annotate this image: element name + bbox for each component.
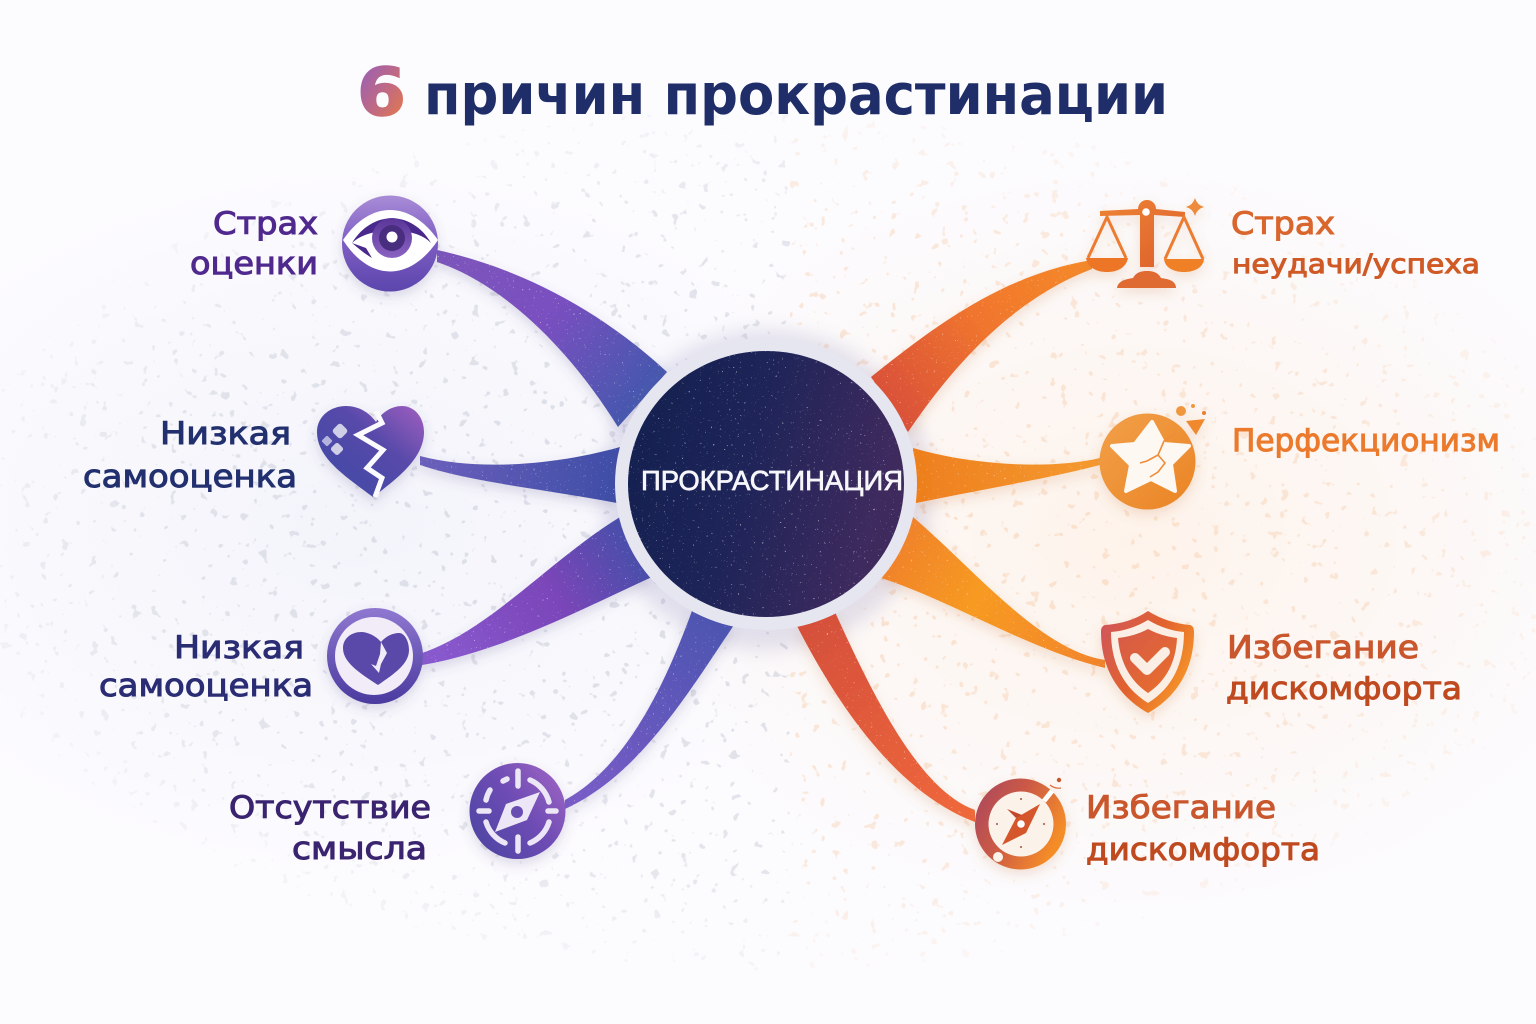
title number 6: 6 [357,54,406,131]
label: Отсутствие смысла: смысла [292,831,427,867]
label: Избегание дискомфорта 2: дискомфорта [1086,832,1320,868]
connector 4 [565,608,734,809]
connector 6 [913,448,1100,503]
label: Перфекционизм: Перфекционизм [1232,423,1500,459]
connector 7 [881,517,1105,668]
connector 8 [797,612,975,822]
icon: purple compass [470,763,566,859]
label: Низкая самооценка 2: самооценка [99,668,313,704]
label: Избегание дискомфорта 1: Избегание [1227,630,1419,666]
icon: orange compass [975,778,1066,870]
label: Избегание дискомфорта 2 [1086,790,1320,868]
label: Отсутствие смысла [229,790,431,867]
icon: shield [1101,611,1194,713]
connector 5 [871,260,1092,432]
label: Низкая самооценка 1: самооценка [83,459,297,495]
hub ring [615,338,917,630]
icon: scales [1086,198,1204,288]
label: Низкая самооценка 2: Низкая [174,630,304,666]
label: Страх неудачи/успеха: Страх [1231,206,1335,242]
label: Низкая самооценка 2 [99,630,313,704]
title text: причин прокрастинации [424,63,1168,128]
hub label: ПРОКРАСТИНАЦИЯ [641,465,903,496]
icon: broken heart [317,406,424,497]
connector 1 [437,250,667,427]
label: Страх неудачи/успеха [1231,206,1480,280]
icon: eye [342,196,438,292]
connectors: purple [420,250,734,809]
icon: heart in circle [327,608,423,704]
connector 3 [422,517,652,665]
label: Избегание дискомфорта 1: дискомфорта [1226,671,1462,707]
label: Избегание дискомфорта 1 [1226,630,1462,707]
hub glow [602,330,932,650]
label: Низкая самооценка 1 [83,416,297,495]
label: Отсутствие смысла: Отсутствие [229,790,431,826]
hub disc [628,351,904,617]
connector 2 [420,447,620,503]
connectors: orange [797,260,1105,822]
label: Низкая самооценка 1: Низкая [160,416,291,452]
label: Избегание дискомфорта 2: Избегание [1086,790,1276,826]
icon: cracked star [1100,404,1206,510]
label: Страх неудачи/успеха: неудачи/успеха [1232,249,1480,280]
title [357,54,1168,131]
label: Страх оценки: Страх [213,206,318,242]
label: Страх оценки [190,206,318,282]
label: Страх оценки: оценки [190,246,318,282]
central hub [615,338,917,630]
